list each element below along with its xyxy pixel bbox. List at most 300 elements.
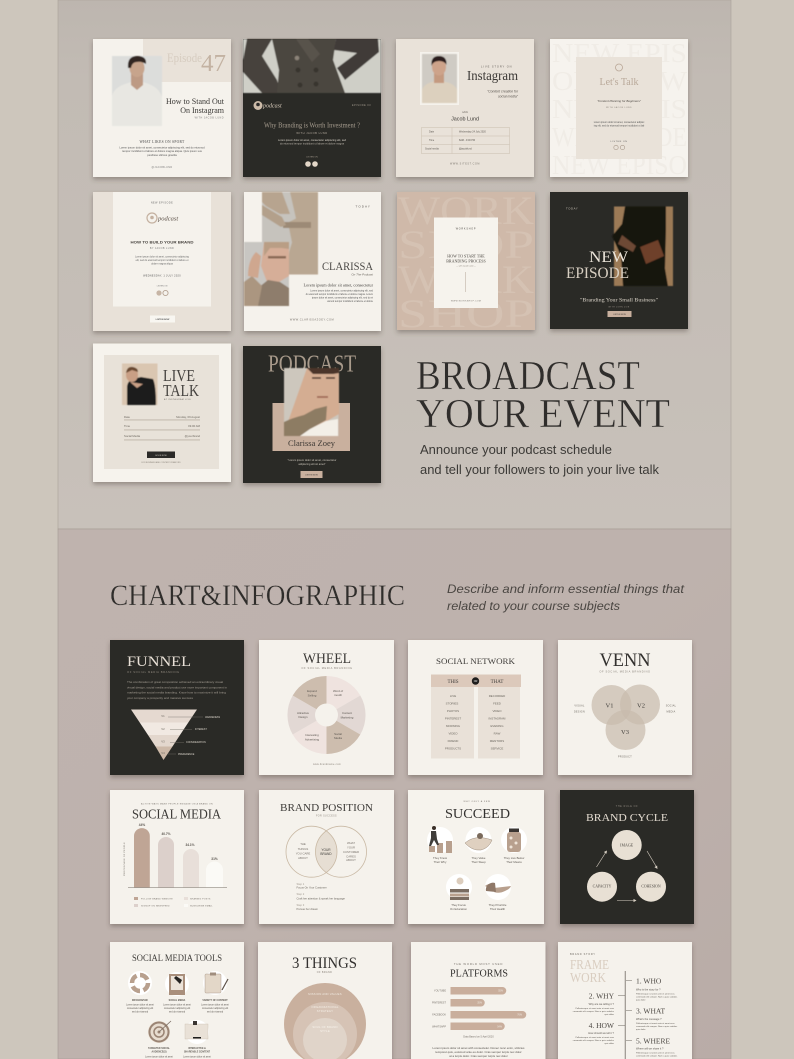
card: let's talk: WITH JACOB LUND — [606, 106, 632, 109]
card: how to build your brand: dolore magna aliqua — [151, 262, 173, 266]
card: brand story framework: Why are we telling it ? — [589, 1002, 615, 1006]
card: brand story framework: quis dolor — [636, 998, 646, 1002]
card: live story on instagram: Date — [429, 130, 435, 134]
chart: funnel triangle: INTEREST — [195, 728, 207, 731]
card: clarissa: TODAY — [355, 204, 371, 208]
card: social media bar chart — [110, 790, 244, 924]
card: brand story framework: Pellentesque sit amet ante et amet eros — [636, 992, 675, 996]
card: let's talk: WE NEW DE — [552, 122, 687, 152]
card: platforms — [411, 942, 546, 1059]
chart: nested circles: STYLE — [320, 1029, 330, 1033]
chart: venn circles: V3 — [621, 729, 629, 736]
card: how to build your brand: Lorem ipsum dolor sit amet, consectetur adipiscing — [135, 256, 190, 258]
card: venn: VISUAL — [574, 704, 585, 708]
card: social media bar chart: SOCIAL MEDIA — [132, 808, 222, 822]
card: venn: SOCIAL — [666, 704, 677, 708]
icon: ring infographic — [128, 971, 152, 995]
card: brand story framework: Pellentesque sit amet ante et amet eros — [636, 1052, 675, 1054]
card: funnel — [110, 640, 244, 775]
card: brand story framework: commodo elit semper. Nam a quis sodales — [573, 1010, 615, 1013]
chart: funnel triangle: V2 — [161, 727, 165, 731]
icon: sleep pillow — [465, 827, 492, 853]
card: brand position: Focus On Your Customer — [296, 886, 327, 890]
card: succeed: Their Means — [506, 860, 522, 864]
card: social network: THAT — [491, 680, 503, 685]
card: funnel: The combination of great composition achieved an extraordinary visual — [127, 680, 223, 684]
text: broadcast description — [420, 443, 660, 477]
card: episode 47: 47 — [201, 51, 226, 77]
card: brand position — [259, 790, 394, 924]
card: brand position: Step 3 — [296, 903, 305, 907]
card: funnel: marketing the social media branding. Know how to maximize it will bring — [127, 690, 227, 694]
card: social media tools: INTERACTIVE & — [188, 1047, 206, 1050]
card: episode 47: WHAT LIKES ON SPORT — [139, 140, 185, 144]
chart: two-circle venn: ABOUT — [346, 858, 356, 862]
card: social media tools: SOCIAL MEDIA — [169, 999, 186, 1002]
chart: horizontal bars: 35% — [477, 1002, 483, 1004]
card: live story on instagram: Social media — [425, 148, 439, 150]
chart: two-circle venn: THE — [300, 842, 306, 846]
card: social network: PINTEREST — [445, 716, 461, 720]
card: succeed: On Education — [450, 907, 467, 911]
card: social network: VIDEO — [492, 709, 502, 713]
icon: savings jar — [501, 827, 527, 853]
card: clarissa: On The Podcast — [351, 272, 373, 276]
card: social media tools: SOCIAL MEDIA TOOLS — [132, 953, 222, 963]
card: succeed: WHY ONLY A FEW — [463, 800, 491, 803]
card: podcast clarissa zoey: LISTEN NOW — [305, 474, 318, 476]
card: live talk: BOOK NOW — [155, 455, 167, 457]
card: funnel: visual design, social media and product use more important component in — [127, 686, 228, 690]
photo: man in white shirt — [112, 56, 162, 126]
card: workshop — [397, 188, 535, 336]
card: social media tools: Lorem ipsum dolor sit amet — [145, 1056, 173, 1058]
card: live talk: AT INSTAGRAM LIVE — [164, 398, 191, 401]
card: brand story framework: 4. HOW — [589, 1021, 615, 1030]
card: brand story framework: Who is the story for ? — [636, 988, 661, 992]
card: brand story framework: Pellentesque sit amet ante et amet eros — [575, 1036, 615, 1039]
card: new episode: TODAY — [566, 206, 578, 210]
card: succeed: They Live Below — [504, 856, 525, 860]
card: clarissa: usmod tempor incididunt ut labore et dolore — [327, 300, 374, 303]
chart: nested circles: SOUL OF BRAND — [312, 1025, 338, 1029]
card: brand cycle: THE RULE OF — [616, 805, 638, 808]
chart: venn circles — [592, 684, 660, 750]
chart: arched bars — [123, 823, 227, 888]
card: new episode: "Branding Your Small Business" — [580, 298, 658, 304]
card: brand story framework: commodo elit semper. Nam a quis sodales — [636, 1054, 678, 1058]
card: wheel — [259, 640, 394, 775]
heading: broadcast your event — [416, 352, 670, 436]
card: brand story framework: commodo elit semper. Nam a quis sodales — [573, 1039, 615, 1042]
text: chart description — [447, 582, 685, 613]
chart: venn circles: V1 — [606, 702, 613, 710]
chart: funnel triangle: V1 — [161, 714, 165, 718]
card: brand story framework: commodo elit semper. Nam a quis sodales — [636, 996, 678, 998]
chart: two-circle venn: YOUR — [347, 846, 355, 850]
chart: two-circle venn: WHAT — [347, 841, 355, 845]
card: brand cycle: BRAND CYCLE — [586, 812, 668, 824]
card: social media tools: consectetur adipiscing elit — [164, 1007, 191, 1010]
card: workshop: WWW.WORKSHOP.COM — [451, 300, 481, 302]
icon: polaroid post — [165, 972, 189, 996]
panel: broadcast section background — [58, 0, 731, 529]
card: 3 things — [258, 942, 392, 1059]
chart: donut wheel: Media — [334, 736, 342, 740]
card: live talk — [93, 344, 231, 482]
chart: donut wheel: Content — [342, 711, 352, 715]
card: new episode: LISTEN NOW — [613, 314, 626, 316]
card: social network: MENTORS — [490, 739, 504, 743]
card: live story on instagram: with — [462, 110, 468, 114]
photo: dark blazer — [243, 39, 381, 93]
card: why branding is worth investment — [243, 39, 381, 177]
card: clarissa: WWW.CLARISSAZOEY.COM — [290, 318, 334, 322]
card: platforms: at a turpis dolor. Cras semper turpis nec dolor — [449, 1054, 508, 1058]
icon: interactive board — [185, 1020, 209, 1044]
card: 3 things: 3 THINGS — [292, 955, 357, 972]
chart: nested circles: ORGANIZATIONAL — [311, 1005, 339, 1009]
chart: horizontal bars: 55% — [498, 990, 504, 992]
card: live story on instagram: social media" — [498, 94, 519, 98]
card: workshop: SHOP — [398, 222, 534, 267]
card: social media tools: sed do eiusmod — [207, 1012, 224, 1014]
card: brand story framework: What's the message ? — [636, 1017, 662, 1021]
card: live story on instagram: "Content creation for — [487, 90, 519, 94]
card: episode 47: WITH JACOB LUND — [195, 116, 224, 120]
legend — [134, 897, 213, 908]
card: new episode: NEW — [589, 249, 629, 266]
card: let's talk: NEW EPIS — [552, 94, 687, 124]
chart: horizontal bars: FACEBOOK — [432, 1014, 446, 1016]
chart: horizontal bars: 54% — [497, 1026, 503, 1028]
card: why branding is worth investment: do eiusmod tempor incididunt ut labore et dolore magna — [280, 142, 345, 146]
card: episode 47: How to Stand Out — [166, 97, 225, 106]
icon: stairs — [427, 826, 453, 853]
card: live story on instagram: WWW.SITEST.COM — [450, 162, 480, 166]
card: social media tools: SHAREABLE CONTENT — [184, 1050, 211, 1054]
card: live story on instagram: LIVE STORY ON — [481, 64, 512, 68]
chart: donut wheel: Design — [298, 715, 308, 719]
card: brand story framework: commodo elit semper. Nam a quis sodales — [636, 1025, 678, 1028]
chart: donut wheel: Selling — [308, 694, 317, 698]
diagram: cycle circles: IMAGE — [620, 842, 634, 848]
card: wheel: www.brandname.com — [313, 763, 341, 766]
diagram: cycle circles — [587, 830, 666, 902]
card: let's talk: NEW EPISO — [552, 150, 687, 180]
chart: donut wheel: Interesting — [305, 733, 319, 737]
card: social media tools: INFOGRAPHIC — [132, 999, 148, 1002]
card: brand story framework: Pellentesque sit amet ante et amet eros — [636, 1022, 675, 1025]
card: brand position: Craft her attention & speak her language — [296, 896, 345, 900]
card: social media tools: Lorem ipsum dolor sit amet — [126, 1004, 154, 1006]
card: brand story framework: Where will we share it ? — [636, 1046, 664, 1050]
card: brand story framework: 3. WHAT — [636, 1006, 665, 1016]
card: social network: RECORDED — [489, 694, 505, 698]
card: podcast clarissa zoey: "Lorem ipsum dolor sit amet, consectetur — [288, 458, 336, 462]
card: episode 47: pendisse ultrices gravida — [147, 153, 177, 157]
card: social network: FRIEND — [448, 739, 458, 743]
card: platforms: temporet quis, euismod ante eu dolor. Cras semper turpis nec dolor — [435, 1050, 522, 1054]
card: succeed: They Know — [433, 856, 448, 860]
card: brand cycle — [560, 790, 694, 924]
chart: nested circles: MISSION AND VALUES — [308, 992, 342, 996]
chart: arched bars: 34.1% — [185, 843, 195, 847]
heading: chart & infographic: CHART&INFOGRAPHIC — [110, 579, 405, 612]
card: live story on instagram: Wednesday 24 July 2020 — [459, 130, 486, 134]
chart: donut wheel: Marketing — [341, 716, 354, 720]
chart: arched bars: PERCENTAGE OF PEOPLE — [123, 842, 126, 876]
card: social network: FEED — [493, 702, 501, 706]
photo: man in polo — [420, 52, 459, 105]
card: brand story framework: How should we tell it ? — [588, 1031, 615, 1035]
legend: SHARING POSTS — [190, 898, 211, 900]
card: live story on instagram: Instagram — [467, 69, 518, 84]
card: brand story framework: WORK — [570, 971, 606, 986]
card: brand story framework: quis dolor — [604, 1013, 614, 1016]
card: episode 47 — [93, 39, 231, 177]
chart: arched bars: 40.7% — [161, 832, 171, 836]
card: live talk: LIVE — [163, 366, 195, 385]
chart: funnel triangle — [131, 710, 221, 760]
chart: two-circle venn: YOUR — [321, 848, 331, 852]
chart: donut wheel: Word of — [333, 689, 343, 693]
card: social network: PHOTOS — [447, 709, 459, 713]
card: live talk: Monday, 09 August — [176, 415, 200, 419]
arrows: cycle — [596, 850, 658, 902]
card: funnel: OF SOCIAL MEDIA BRANDING — [127, 670, 180, 674]
card: social network: VIDEO — [448, 732, 458, 736]
chart: two-circle venn: BRAND — [320, 852, 332, 856]
card: clarissa: ipsum dolor sit amet, consectetur adipiscing elit, sed do ei — [312, 296, 373, 300]
card: succeed — [408, 790, 544, 924]
chart: funnel triangle: V4 — [161, 751, 165, 755]
card: live story on instagram — [396, 39, 534, 177]
card: live talk: Time — [124, 424, 131, 428]
card: episode 47: @JACOBLUND — [152, 166, 172, 169]
card: let's talk: Let's Talk — [600, 77, 638, 88]
card: why branding is worth investment: WITH JACOB LUND — [296, 131, 328, 135]
card: workshop: WORKSHOP — [456, 228, 476, 230]
card: social network: OR — [474, 680, 478, 683]
chart: funnel triangle: PREFERENCE — [178, 753, 195, 756]
card: how to build your brand: WEDNESDAY, 1 JULY 2020 — [143, 274, 181, 278]
card: workshop: WORK — [398, 188, 534, 233]
card: let's talk — [550, 38, 688, 180]
card: clarissa: CLARISSA — [322, 259, 373, 273]
card: podcast clarissa zoey: Clarissa Zoey — [288, 439, 335, 448]
panel: chart section background — [58, 529, 731, 1059]
chart: venn circles: V2 — [637, 702, 645, 710]
card: live story on instagram: 8AM - 9:00 PM — [459, 139, 475, 142]
card: succeed: Their Health — [490, 907, 506, 911]
chart: horizontal bars — [432, 987, 526, 1030]
card: live story on instagram: Time — [429, 139, 435, 142]
card: podcast clarissa zoey: adipiscing elit sit amet" — [298, 462, 326, 466]
photo: woman in turtleneck — [244, 242, 289, 306]
card: why branding is worth investment: Why Branding is Worth Investment ? — [264, 122, 360, 130]
card: social network: INSTAGRAM — [489, 716, 506, 720]
card: brand position: Step 2 — [296, 892, 305, 896]
card: workshop: HOW TO START THE — [447, 254, 485, 258]
card: episode 47: Episode — [167, 50, 202, 65]
card: how to build your brand — [93, 192, 231, 331]
card: brand story framework — [558, 942, 692, 1059]
legend: SIGNUP ON NEWSFEED — [141, 906, 170, 908]
card: brand story framework: quis dolor — [604, 1042, 614, 1045]
card: social network: THIS — [447, 680, 459, 685]
card: workshop: — with Jacob Lund — — [456, 264, 476, 268]
card: venn: PRODUCT — [618, 756, 632, 758]
card: let's talk: NEW EPIS — [552, 38, 687, 68]
card: social network: MORNING — [446, 724, 461, 728]
card: platforms: PLATFORMS — [450, 968, 508, 980]
text: chart description: related to your course subjects — [447, 599, 620, 613]
card: how to build your brand: elit, sed do eiusmod tempor incididunt ut labore et — [136, 259, 189, 262]
icon: clipboard checklist — [203, 971, 228, 995]
card: let's talk: ing elit, sed do eiusmod tempor incididunt ut lab — [594, 124, 645, 128]
card: how to build your brand: NEW EPISODE — [151, 202, 173, 204]
diagram: cycle circles: COHESION — [641, 884, 661, 888]
card: live talk: Social Media — [124, 434, 140, 438]
card: succeed: Their Why — [434, 860, 447, 864]
card: clarissa: Lorem ipsum dolor sit amet, consectetur — [304, 282, 374, 288]
card: succeed: They Focus — [451, 903, 466, 907]
card: podcast clarissa zoey: PODCAST — [268, 352, 356, 378]
card: live talk: 09.00 AM — [188, 424, 201, 428]
card: venn: VENN — [600, 650, 651, 671]
card: platforms: Lorem ipsum dolor sit amet with consectetur. Donec nunc enim, ultricies — [433, 1046, 525, 1050]
legend: FOLLOW BRAND WEBSITE — [141, 898, 173, 900]
chart: nested circles: STRATEGY — [317, 1009, 333, 1013]
card: let's talk: ODE NEW — [552, 66, 688, 96]
heading: broadcast your event: BROADCAST — [416, 352, 640, 398]
card: succeed: SUCCEED — [445, 807, 510, 822]
icon: books and bulb — [446, 874, 472, 900]
card: workshop: SHOP — [398, 291, 534, 336]
card: how to build your brand: LISTEN ON — [157, 286, 168, 288]
chart: two-circle venn: CARES — [346, 854, 356, 858]
card: brand story framework: quis dolor — [636, 1028, 646, 1031]
card: social media tools: TARGETED SOCIAL — [148, 1047, 170, 1050]
card: social media tools: Lorem ipsum dolor sit amet — [183, 1056, 211, 1058]
card: why branding is worth investment: Lorem ipsum dolor sit amet, consectetur adipiscing elit, sed — [278, 138, 347, 142]
chart: two-circle venn: ABOUT — [298, 856, 308, 860]
chart: horizontal bars: 76% — [517, 1014, 523, 1016]
card: brand position: Pursue her dream — [296, 907, 319, 911]
card: workshop: BRANDING PROCESS — [446, 258, 486, 264]
card: social media tools: AUDIENCE(S) — [151, 1050, 167, 1054]
card: succeed: Their Sleep — [471, 860, 486, 864]
card: wheel: OF SOCIAL MEDIA BRANDING — [301, 666, 353, 670]
card: episode 47: tempor incididunt ut labore et dolore magna aliqua. Quis ipsum sus — [122, 149, 202, 153]
card: clarissa — [244, 192, 381, 331]
info table — [422, 128, 510, 154]
card: why branding is worth investment: EPISODE 03 — [352, 103, 371, 107]
photo: man in black shirt — [122, 364, 158, 405]
card: why branding is worth investment: LISTEN ON — [306, 156, 318, 158]
photo: woman portrait — [284, 368, 339, 436]
logo: podcast: podcast — [157, 216, 178, 222]
card: let's talk: Lorem ipsum dolor sit amet, consectetur adipisc — [594, 121, 645, 124]
card: funnel: FUNNEL — [127, 654, 191, 670]
photo: beige dress — [262, 192, 318, 274]
card: brand position: BRAND POSITION — [280, 802, 373, 814]
card: workshop: WORK — [398, 257, 534, 302]
chart: funnel triangle: CONSIDERATION — [186, 741, 206, 744]
card: live talk: TALK — [163, 381, 200, 400]
card: brand story framework: Pellentesque sit amet ante et amet eros — [575, 1007, 615, 1010]
card: how to build your brand: LISTEN NOW — [156, 319, 170, 321]
card: venn: OF SOCIAL MEDIA BRANDING — [599, 670, 651, 674]
icon: sliced fruit — [485, 874, 511, 900]
card: social network: SOCIAL NETWORK — [436, 656, 516, 666]
card: social media tools: consectetur adipiscing elit — [202, 1007, 229, 1010]
chart: donut wheel: Expand — [307, 689, 317, 693]
card: new episode — [550, 192, 688, 329]
card: venn: MEDIA — [666, 710, 676, 714]
card: podcast clarissa zoey — [243, 346, 381, 483]
chart: two-circle venn: CUSTOMER — [343, 850, 359, 854]
card: social network: EVENING — [490, 724, 504, 728]
card: brand story framework: 2. WHY — [589, 992, 615, 1000]
card: brand story framework: 5. WHERE — [636, 1036, 670, 1046]
card: live talk: Date — [124, 415, 130, 419]
card: social network: SERVICE — [491, 746, 503, 750]
logo: podcast: podcast — [262, 104, 282, 110]
legend: SUBSCRIBE EMAIL — [190, 904, 213, 908]
card: 3 things: OF BRAND — [317, 971, 332, 974]
card: how to build your brand: BY JACOB LUND — [150, 247, 174, 250]
card: brand position: Step 1 — [296, 882, 305, 886]
card: social media tools: Lorem ipsum dolor sit amet — [163, 1004, 191, 1006]
card: live story on instagram: @jacoblund — [459, 148, 472, 150]
photo: woman with brown bag — [612, 206, 673, 286]
chart: donut wheel: Social — [334, 732, 342, 736]
card: clarissa: do eiusmod tempor incididunt ut labore et dolore magna. Lorem — [306, 293, 373, 296]
text: broadcast description: and tell your followers to join your live talk — [420, 463, 660, 477]
chart: arched bars: 44% — [139, 823, 145, 827]
card: let's talk: LISTEN ON — [611, 141, 627, 143]
text: broadcast description: Announce your podcast schedule — [420, 443, 612, 457]
chart: donut wheel — [287, 676, 366, 754]
card: succeed: They Prioritize — [489, 903, 507, 907]
chart: funnel triangle: AWARENESS — [205, 716, 221, 719]
card: social media tools: sed do eiusmod — [169, 1012, 186, 1014]
card: live story on instagram: Jacob Lund — [451, 116, 479, 122]
chart: horizontal bars: PINTEREST — [432, 1002, 446, 1004]
card: how to build your brand: HOW TO BUILD YOUR BRAND — [130, 240, 194, 244]
card: new episode: WITH JOHN DOE — [608, 306, 630, 308]
icon: target — [148, 1021, 171, 1043]
card: clarissa: Lorem ipsum dolor sit amet, consectetur adipiscing elit, sed — [310, 290, 374, 292]
chart: horizontal bars: WHATSAPP — [432, 1026, 446, 1028]
card: social media bar chart: ACTIVE WAYS MAKE PEOPLE ENGAGE ON A BRAND ON — [141, 802, 213, 806]
card: new episode: EPISODE — [566, 265, 629, 282]
card: social network: LIVE — [450, 694, 456, 698]
card: social network — [408, 640, 543, 775]
card: funnel: your company a prosperity and massive success — [127, 696, 194, 700]
card: brand position: FOR SUCCESS — [316, 816, 337, 818]
card: platforms: Data Based on 5 April 2020 — [463, 1036, 494, 1038]
heading: broadcast your event: YOUR EVENT — [416, 390, 670, 436]
text: chart description: Describe and inform essential things that — [447, 582, 685, 596]
chart: donut wheel: Advertising — [305, 738, 320, 742]
card: live talk: FOR BUSINESS AND CONTENT CREATORS — [142, 461, 181, 464]
card: venn — [558, 640, 692, 775]
card: social media tools: consectetur adipiscing elit — [127, 1007, 154, 1010]
card: wheel: WHEEL — [303, 651, 351, 667]
